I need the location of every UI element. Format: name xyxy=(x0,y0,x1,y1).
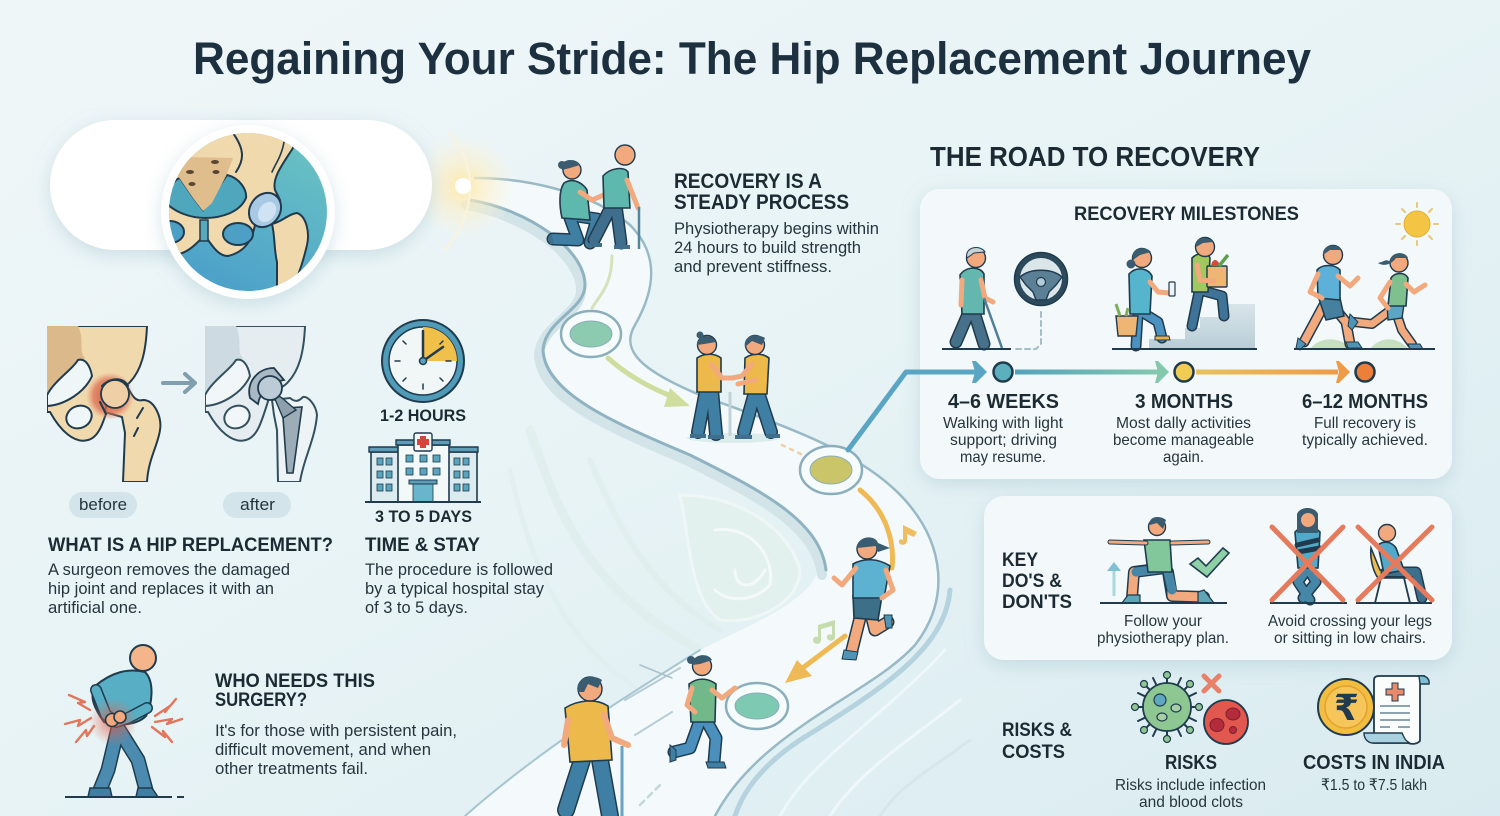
arrow: before to after xyxy=(163,374,195,392)
icon: music note orange xyxy=(899,525,917,545)
waypoint disc 2 xyxy=(800,446,862,494)
text block: what is a hip replacement xyxy=(48,534,333,617)
icon: clock xyxy=(382,320,464,402)
people: runner in blue xyxy=(834,537,893,660)
text block: recovery is a steady process: RECOVERY IS A xyxy=(674,170,822,193)
risks and costs heading xyxy=(1002,719,1072,763)
waypoint disc 3 xyxy=(726,683,788,729)
text block: recovery is a steady process xyxy=(674,170,879,276)
milestone text: 3 months: again. xyxy=(1163,449,1204,466)
milestone text: 4-6 weeks: 4–6 WEEKS xyxy=(948,391,1059,413)
risks text: Risks include infection xyxy=(1115,777,1266,794)
icon: medical bill xyxy=(1364,676,1429,744)
icon: sun xyxy=(1396,203,1438,245)
don't text: or sitting in low chairs. xyxy=(1274,630,1426,647)
milestone text: 3 months: become manageable xyxy=(1113,432,1254,449)
icon: green check xyxy=(1190,548,1229,577)
do text xyxy=(1097,613,1229,647)
duration label: 1-2 HOURS xyxy=(380,407,466,425)
icon: up arrow xyxy=(1107,562,1121,596)
costs text: ₹1.5 to ₹7.5 lakh xyxy=(1321,777,1427,794)
heading: the road to recovery: THE ROAD TO RECOVERY xyxy=(930,141,1260,172)
icon: hospital xyxy=(365,433,481,502)
dotted path xyxy=(782,445,805,456)
costs text xyxy=(1303,752,1445,794)
figure: low chair with X xyxy=(1356,524,1432,603)
before label xyxy=(69,492,137,518)
costs text: COSTS IN INDIA xyxy=(1303,752,1445,774)
milestone text: 4-6 weeks: may resume. xyxy=(960,449,1046,466)
after label: after xyxy=(240,495,275,514)
waypoint disc 1 xyxy=(561,311,621,357)
panel: key do's and don'ts xyxy=(984,496,1452,660)
arrow: orange back toward road xyxy=(785,636,845,683)
winding road xyxy=(465,178,950,816)
don't text: Avoid crossing your legs xyxy=(1268,613,1432,630)
milestone text: 6-12 months xyxy=(1302,391,1428,449)
milestone text: 3 months xyxy=(1113,391,1254,466)
text block: who needs this surgery: WHO NEEDS THIS xyxy=(215,670,375,692)
don't text xyxy=(1268,613,1432,647)
text block: who needs this surgery: other treatments fail. xyxy=(215,760,368,778)
icon: steering wheel xyxy=(1014,252,1068,349)
milestone text: 6-12 months: 6–12 MONTHS xyxy=(1302,391,1428,413)
text block: who needs this surgery: difficult movement, and when xyxy=(215,741,431,759)
text block: time and stay: of 3 to 5 days. xyxy=(365,599,468,617)
do's heading: DON'TS xyxy=(1002,591,1072,613)
people: helping pair in yellow xyxy=(687,332,780,443)
text block: what is a hip replacement: artificial one. xyxy=(48,599,142,617)
hip joint artwork xyxy=(169,133,327,291)
arrow: to second pair xyxy=(608,358,690,407)
icon: music notes green xyxy=(813,620,835,644)
after hip illustration xyxy=(205,326,317,482)
arrow: road segment 1 xyxy=(592,256,612,308)
text block: who needs this surgery: SURGERY? xyxy=(215,689,307,711)
figure: walking with crutch xyxy=(942,247,1011,349)
title: Regaining Your Stride: The Hip Replacement Journey xyxy=(193,33,1311,84)
text block: recovery is a steady process: STEADY PROCESS xyxy=(674,191,849,214)
before hip illustration xyxy=(47,326,160,482)
icon: rupee coin xyxy=(1318,679,1374,735)
milestone text: 6-12 months: typically achieved. xyxy=(1302,432,1428,449)
do's heading: DO'S & xyxy=(1002,570,1062,592)
risks and costs heading: RISKS & xyxy=(1002,719,1072,741)
text block: who needs this surgery: It's for those with persistent pain, xyxy=(215,722,457,740)
text block: time and stay xyxy=(365,534,553,617)
text block: time and stay: TIME & STAY xyxy=(365,534,480,556)
text block: time and stay: by a typical hospital stay xyxy=(365,580,545,598)
icon: rupee coin: ₹ xyxy=(1334,688,1359,729)
milestone text: 3 months: 3 MONTHS xyxy=(1135,391,1233,413)
stay label: 3 TO 5 DAYS xyxy=(375,508,472,526)
panel: recovery milestones xyxy=(920,189,1452,479)
milestone text: 4-6 weeks: Walking with light xyxy=(943,415,1064,432)
do text: Follow your xyxy=(1124,613,1203,630)
icon: blood clot xyxy=(1204,700,1248,744)
text block: recovery is a steady process: and prevent stiffness. xyxy=(674,258,832,276)
milestone timeline xyxy=(994,361,1374,383)
panel heading: RECOVERY MILESTONES xyxy=(1074,203,1299,225)
text block: time and stay: The procedure is followed xyxy=(365,561,553,579)
milestone text: 6-12 months: Full recovery is xyxy=(1314,415,1416,432)
figure: lunge exercise xyxy=(1100,517,1227,603)
icon: man with hip pain xyxy=(65,645,184,797)
flowing lines left of road xyxy=(510,430,800,690)
text block: what is a hip replacement: WHAT IS A HIP REPLACEMENT? xyxy=(48,534,333,556)
do's heading: KEY xyxy=(1002,549,1038,571)
text block: what is a hip replacement: A surgeon removes the damaged xyxy=(48,561,290,579)
risks text: and blood clots xyxy=(1139,794,1243,811)
text block: what is a hip replacement: hip joint and replaces it with an xyxy=(48,580,274,598)
risks and costs heading: COSTS xyxy=(1002,741,1065,763)
stream lines lower right xyxy=(780,650,970,816)
icon: virus xyxy=(1132,672,1202,742)
figure: crossed legs with X xyxy=(1270,508,1347,603)
figure: runners xyxy=(1294,246,1435,350)
figure: people on stairs xyxy=(1112,238,1257,349)
text block: who needs this surgery xyxy=(215,670,457,778)
hip illustration pill xyxy=(50,120,432,300)
text block: recovery is a steady process: Physiotherapy begins within xyxy=(674,220,879,238)
milestone text: 4-6 weeks: support; driving xyxy=(950,432,1057,449)
milestone text: 4-6 weeks xyxy=(943,391,1064,466)
after label xyxy=(223,492,291,518)
risks text: RISKS xyxy=(1165,752,1217,774)
do text: physiotherapy plan. xyxy=(1097,630,1229,647)
people: woman in green xyxy=(670,655,735,768)
text block: recovery is a steady process: 24 hours to build strength xyxy=(674,239,861,257)
connector arrow into milestones xyxy=(848,361,987,450)
risks text xyxy=(1115,752,1266,811)
icon: red x xyxy=(1204,676,1219,691)
sun glow at start of road xyxy=(411,132,515,250)
people: therapist and patient xyxy=(550,145,639,249)
arrow: orange road segment xyxy=(860,490,893,568)
do's heading xyxy=(1002,549,1072,613)
people: man with cane in yellow xyxy=(564,677,628,816)
before label: before xyxy=(79,495,127,514)
milestone text: 3 months: Most dally activities xyxy=(1116,415,1251,432)
